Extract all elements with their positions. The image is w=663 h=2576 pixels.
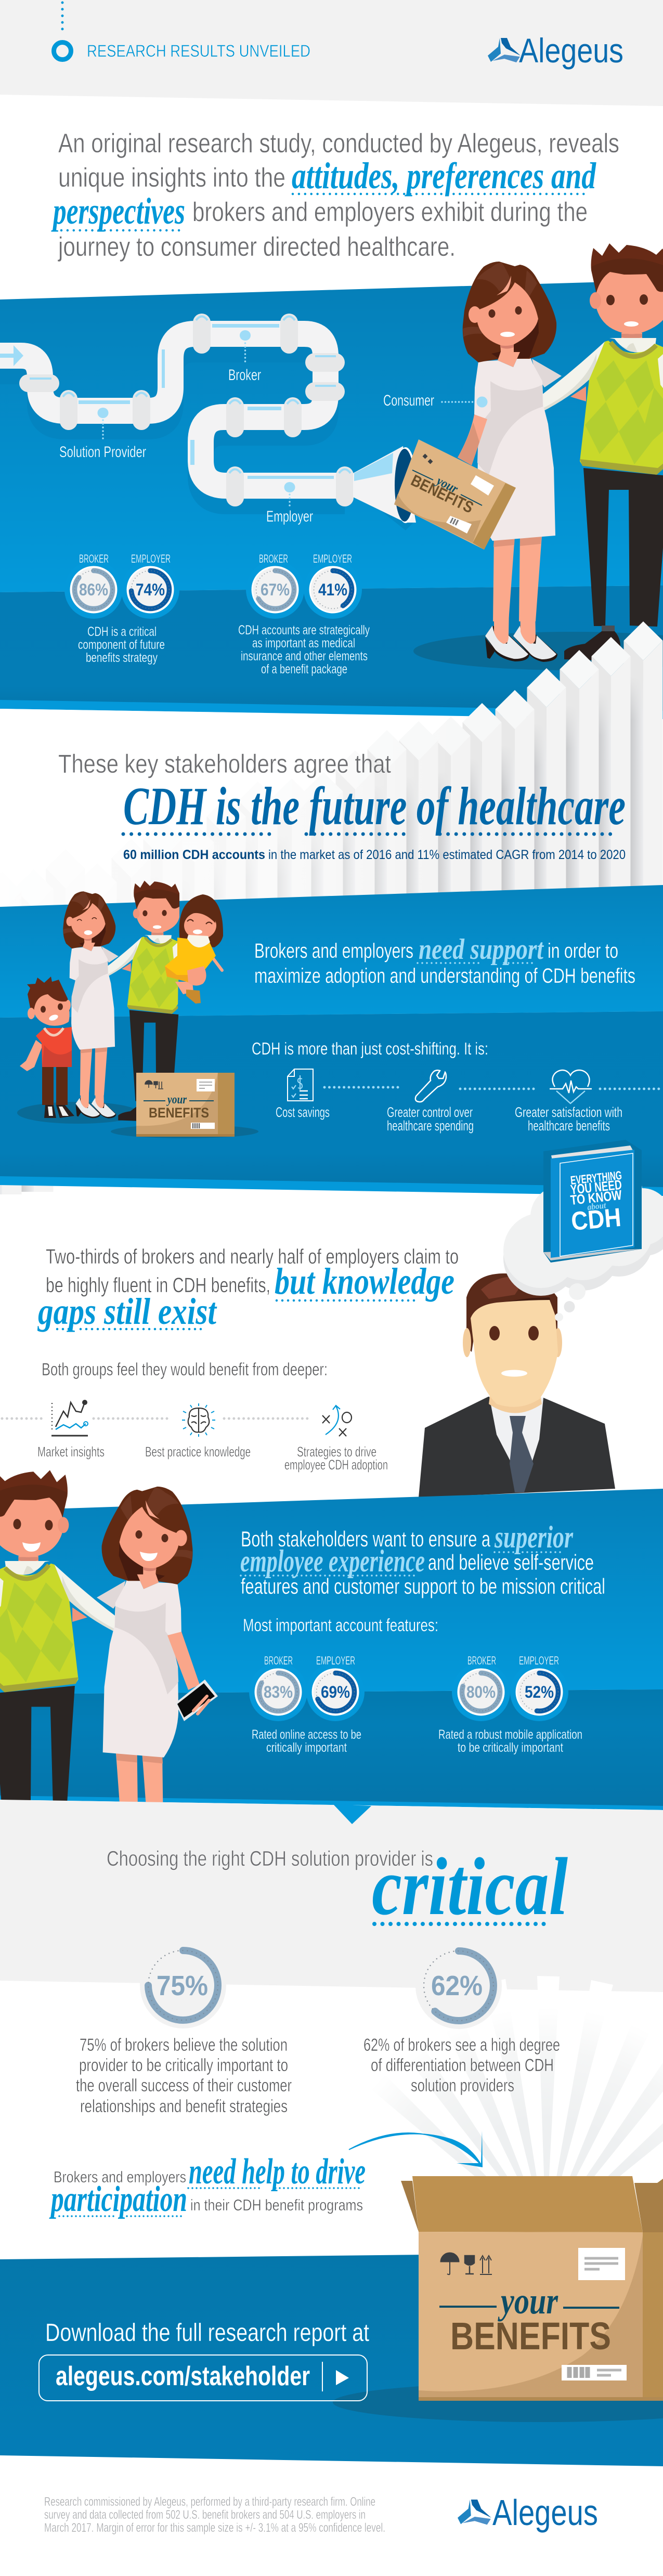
pipe flow highlights [0, 324, 334, 479]
pipeline diagram [0, 314, 417, 530]
ring: broker 80% [452, 1663, 510, 1721]
ring: employer 52% [510, 1663, 568, 1721]
book: everything you need to know about CDH: CDH [570, 1203, 622, 1236]
tilted benefits box: BENEFITS [408, 471, 476, 517]
box: your benefits, family: your [166, 1093, 187, 1107]
large benefits box: your [498, 2280, 558, 2322]
character: woman with box [458, 262, 562, 662]
icon: play diagram [322, 1406, 352, 1436]
stat rings: mobile application [438, 1654, 582, 1755]
text: superior employee experience: and believe self-service [428, 1550, 594, 1575]
shipping icons [440, 2253, 492, 2274]
book: everything you need to know about CDH: EVERYTHING [570, 1168, 622, 1187]
icon: heart with pulse [550, 1070, 592, 1103]
label: consumer: Consumer [383, 392, 434, 409]
icon: document [288, 1069, 313, 1101]
text: 75% description: 75% of brokers believe the solution [80, 2035, 288, 2055]
call to action [39, 2319, 369, 2401]
label: broker: Broker [228, 367, 261, 384]
text: both groups feel: Both groups feel they would benefit from deeper: [42, 1360, 328, 1380]
text: 75% description: the overall success of their customer [76, 2076, 292, 2096]
heading: choosing the right provider is critical: critical [372, 1841, 568, 1932]
stat rings: CDH accounts strategically important: of a benefit package [261, 662, 347, 676]
text: most important account features: Most important account features: [243, 1616, 438, 1635]
benefit: greater satisfaction: Greater satisfaction with [515, 1104, 622, 1120]
ring: broker 80%: 80% [466, 1683, 496, 1701]
header kicker: research results unveiled: RESEARCH RESULTS UNVEILED [87, 42, 310, 60]
benefit: cost savings [276, 1069, 330, 1120]
ring: 62% of brokers: 62% [431, 1970, 483, 2001]
character: man, section three [0, 1470, 117, 1871]
benefit: cost savings: Cost savings [276, 1104, 330, 1120]
text: need help to drive participation: participation [49, 2179, 187, 2219]
methodology note [44, 2495, 385, 2535]
text: 75% description [76, 2035, 292, 2116]
stat rings: CDH critical component: CDH is a critical [87, 625, 157, 639]
stat rings: mobile application: Rated a robust mobile application [438, 1727, 582, 1742]
character: man in family [103, 881, 179, 1122]
ring: employer 69% [306, 1663, 365, 1721]
stat rings: online access: BROKER [264, 1654, 293, 1667]
ring: broker 83%: 83% [264, 1683, 293, 1701]
ring: broker 67%: 67% [261, 580, 290, 599]
text: knowledge gaps still exist: gaps still exist [37, 1291, 217, 1332]
button: report link: alegeus.com/stakeholder [56, 2361, 310, 2391]
stat rings: CDH critical component: BROKER [79, 552, 109, 565]
methodology note: Research commissioned by Alegeus, performed by a third-party research firm. Online [44, 2495, 375, 2509]
label: solution provider: Solution Provider [59, 444, 146, 461]
text: need help to drive participation [49, 2152, 366, 2219]
character: woman in family [63, 891, 119, 1118]
text: superior employee experience: superior [494, 1520, 573, 1554]
topic: market insights [37, 1400, 105, 1460]
label: solution provider [59, 408, 146, 461]
stat rings: CDH accounts strategically important: CDH accounts are strategically [238, 623, 370, 638]
ring: employer 41%: 41% [318, 580, 347, 599]
intro paragraph: journey to consumer directed healthcare. [57, 232, 456, 262]
stat rings: mobile application: EMPLOYER [519, 1654, 559, 1667]
large benefits box [401, 2176, 663, 2401]
phone [175, 1680, 218, 1721]
benefit: greater control [387, 1070, 474, 1134]
text: 62% description [363, 2035, 560, 2096]
text: superior employee experience: Both stakeholders want to ensure a [241, 1527, 490, 1551]
stat rings: mobile application: BROKER [467, 1654, 496, 1667]
shipping label [578, 2248, 625, 2280]
icon: brain [182, 1403, 215, 1437]
text: 75% description: provider to be critically important to [79, 2055, 288, 2075]
button: report link [39, 2355, 367, 2401]
text: superior employee experience: employee experience [240, 1544, 425, 1578]
text: knowledge gaps still exist: Two-thirds of brokers and nearly half of employers claim to [46, 1245, 459, 1268]
text: knowledge gaps still exist [37, 1245, 459, 1332]
heading: choosing the right provider is critical: Choosing the right CDH solution provider is [107, 1846, 433, 1870]
book: everything you need to know about CDH [543, 1140, 642, 1263]
pipe flanges [19, 314, 354, 506]
ring: 62% of brokers [415, 1943, 502, 2029]
text: 62% description: solution providers [411, 2076, 514, 2096]
stat rings: CDH accounts strategically important: EMPLOYER [313, 552, 352, 565]
logo: Alegeus top [488, 31, 623, 70]
dotted connectors [2, 1417, 308, 1420]
text: need help to drive participation: need help to drive [189, 2152, 366, 2192]
benefit: greater satisfaction [515, 1070, 622, 1134]
book: everything you need to know about CDH: YOU NEED [569, 1177, 622, 1198]
ring: employer 74% [121, 561, 179, 619]
ring: employer 74%: 74% [136, 580, 165, 599]
stat rings: CDH critical component [64, 552, 179, 665]
text: knowledge gaps still exist: but knowledge [275, 1260, 454, 1302]
heading: CDH is the future of healthcare: 60 million CDH accounts [123, 848, 265, 862]
ring: 75% of brokers [140, 1942, 226, 2028]
benefit: greater control: healthcare spending [387, 1118, 474, 1134]
logo: Alegeus bottom: Alegeus [492, 2492, 598, 2533]
topic: strategies [284, 1406, 388, 1473]
stat rings: CDH accounts strategically important: insurance and other elements [241, 649, 368, 663]
topic: best practice knowledge: Best practice knowledge [145, 1444, 251, 1460]
header kicker: research results unveiled [54, 3, 310, 60]
character: businessman [419, 1273, 615, 1498]
stat rings: online access [249, 1654, 365, 1755]
methodology note: March 2017. Margin of error for this sample size is +/- 3.1% at a 95% confidence level. [44, 2521, 385, 2535]
topic: strategies: Strategies to drive [297, 1444, 376, 1460]
ring: broker 86% [64, 561, 123, 619]
topic: market insights: Market insights [37, 1444, 105, 1460]
text: brokers and employers need support: Brokers and employers [254, 940, 413, 962]
intro paragraph: perspectives [51, 190, 185, 232]
call to action: Download the full research report at [45, 2319, 369, 2347]
character: woman with phone [97, 1487, 218, 1875]
icon: wrench [415, 1070, 446, 1102]
text: 62% description: 62% of brokers see a high degree [363, 2035, 560, 2055]
stat rings: online access: Rated online access to be [252, 1727, 361, 1742]
heading: CDH is the future of healthcare [58, 749, 626, 862]
label: employer: Employer [266, 508, 313, 525]
label: broker [228, 330, 261, 384]
tilted benefits box [394, 439, 516, 550]
methodology note: survey and data collected from 502 U.S. benefit brokers and 504 U.S. employers in [44, 2508, 366, 2522]
character: girl [165, 894, 223, 1004]
ring: employer 52%: 52% [525, 1683, 554, 1701]
funnel [353, 446, 416, 523]
box: your benefits, family: BENEFITS [149, 1105, 209, 1121]
panel: superior employee experience background [0, 1489, 663, 1810]
panel: download footer background [0, 2252, 663, 2466]
book: everything you need to know about CDH: TO KNOW [569, 1187, 622, 1208]
stat rings: CDH accounts strategically important [238, 552, 370, 676]
book: everything you need to know about CDH: about [587, 1200, 607, 1212]
stat rings: CDH accounts strategically important: as important as medical [252, 636, 355, 650]
barcode label [562, 2365, 627, 2380]
topic: best practice knowledge [145, 1403, 251, 1460]
text: brokers and employers need support: in order to [548, 940, 618, 962]
ring: broker 67% [246, 561, 304, 619]
stat rings: online access: EMPLOYER [316, 1654, 355, 1667]
text: need help to drive participation: in their CDH benefit programs [190, 2196, 363, 2214]
icon: chart [51, 1400, 88, 1436]
tilted benefits box: your [433, 473, 460, 497]
ring: employer 69%: 69% [321, 1683, 350, 1701]
character: boy [20, 977, 74, 1118]
text: CDH is more than just cost-shifting: CDH is more than just cost-shifting. It is: [252, 1039, 488, 1058]
text: knowledge gaps still exist: be highly fluent in CDH benefits, [46, 1274, 270, 1297]
arrow to box [349, 2131, 483, 2167]
logo: Alegeus top: Alegeus [519, 31, 623, 70]
header band [0, 0, 663, 106]
stat rings: CDH critical component: component of future [78, 638, 165, 652]
box: your benefits, family [136, 1073, 235, 1137]
stat rings: mobile application: to be critically important [458, 1740, 563, 1755]
intro paragraph [51, 128, 619, 262]
thought cloud [503, 1162, 663, 1321]
panel: brokers need support background [0, 885, 663, 1196]
text: 75% description: relationships and benefit strategies [80, 2097, 288, 2116]
decorative fence rising to the right [0, 621, 662, 1194]
stat rings: CDH accounts strategically important: BROKER [259, 552, 288, 565]
logo: Alegeus bottom [458, 2492, 598, 2533]
stat rings: CDH critical component: EMPLOYER [131, 552, 171, 565]
topic: strategies: employee CDH adoption [284, 1457, 388, 1473]
heading: choosing the right provider is critical [107, 1841, 568, 1932]
text: brokers and employers need support [254, 933, 635, 987]
text: 62% description: of differentiation between CDH [371, 2055, 554, 2075]
ring: employer 41% [304, 561, 362, 619]
heading: CDH is the future of healthcare: in the market as of 2016 and 11% estimated CAGR from 2014 to 2020 [268, 848, 626, 862]
ring: broker 83% [249, 1663, 307, 1721]
text: brokers and employers need support: need support [419, 933, 544, 966]
heading: CDH is the future of healthcare: These key stakeholders agree that [58, 749, 391, 778]
benefit: greater satisfaction: healthcare benefits [528, 1118, 610, 1134]
stat rings: online access: critically important [266, 1740, 347, 1755]
ring: broker 86%: 86% [79, 580, 108, 599]
intro paragraph: unique insights into the [58, 163, 285, 193]
large benefits box: BENEFITS [450, 2314, 611, 2358]
text: superior employee experience [240, 1520, 605, 1598]
ring: 75% of brokers: 75% [157, 1970, 208, 2001]
benefit: greater control: Greater control over [387, 1104, 473, 1120]
label: employer [266, 482, 313, 525]
decorative rays [347, 1976, 663, 2236]
panel: stakeholders journey background [0, 280, 663, 719]
stat rings: CDH critical component: benefits strategy [86, 650, 158, 665]
character: man, green vest [539, 243, 663, 661]
text: need help to drive participation: Brokers and employers [54, 2168, 186, 2186]
panel: choosing provider background [0, 1800, 663, 1992]
